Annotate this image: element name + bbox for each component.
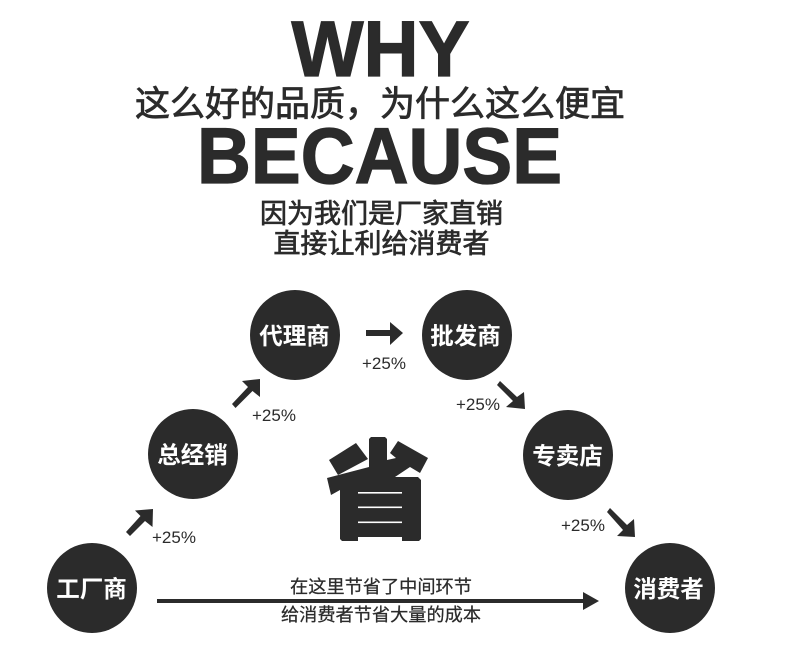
node: store <box>523 410 613 500</box>
icon: save character <box>327 437 428 541</box>
arrow: wholesaler to store <box>497 381 525 409</box>
label: +25% fifth: +25% <box>561 516 605 535</box>
label: +25% first: +25% <box>152 528 196 547</box>
text block: answer <box>260 199 503 259</box>
node: factory: 工厂商 <box>56 576 127 602</box>
arrow: store to consumer <box>607 508 635 537</box>
arrow: distributor to agent <box>232 379 260 408</box>
node: agent <box>250 290 340 380</box>
node: general distributor: 总经销 <box>157 442 228 468</box>
label: +25% fourth: +25% <box>456 395 500 414</box>
title: BECAUSE: BECAUSE <box>197 111 562 200</box>
node: agent: 代理商 <box>259 323 330 349</box>
label: +25% third: +25% <box>362 354 406 373</box>
node: store: 专卖店 <box>532 443 603 469</box>
arrow: direct from factory to consumer <box>157 592 599 610</box>
node: wholesaler: 批发商 <box>430 323 501 349</box>
text: consumer savings: 给消费者节省大量的成本 <box>281 605 481 625</box>
text: saved middle links: 在这里节省了中间环节 <box>290 577 472 597</box>
text block: answer: 因为我们是厂家直销 <box>260 199 503 229</box>
node: general distributor <box>148 409 238 499</box>
title: WHY: WHY <box>292 4 470 93</box>
heading: question: 这么好的品质，为什么这么便宜 <box>135 85 625 124</box>
node: consumer: 消费者 <box>633 576 704 602</box>
node: wholesaler <box>422 290 512 380</box>
arrow: factory to distributor <box>126 509 153 536</box>
text block: answer: 直接让利给消费者 <box>274 229 490 259</box>
node: consumer <box>625 543 715 633</box>
arrow: agent to wholesaler <box>366 322 403 345</box>
node: factory <box>47 543 137 633</box>
label: +25% second: +25% <box>252 406 296 425</box>
